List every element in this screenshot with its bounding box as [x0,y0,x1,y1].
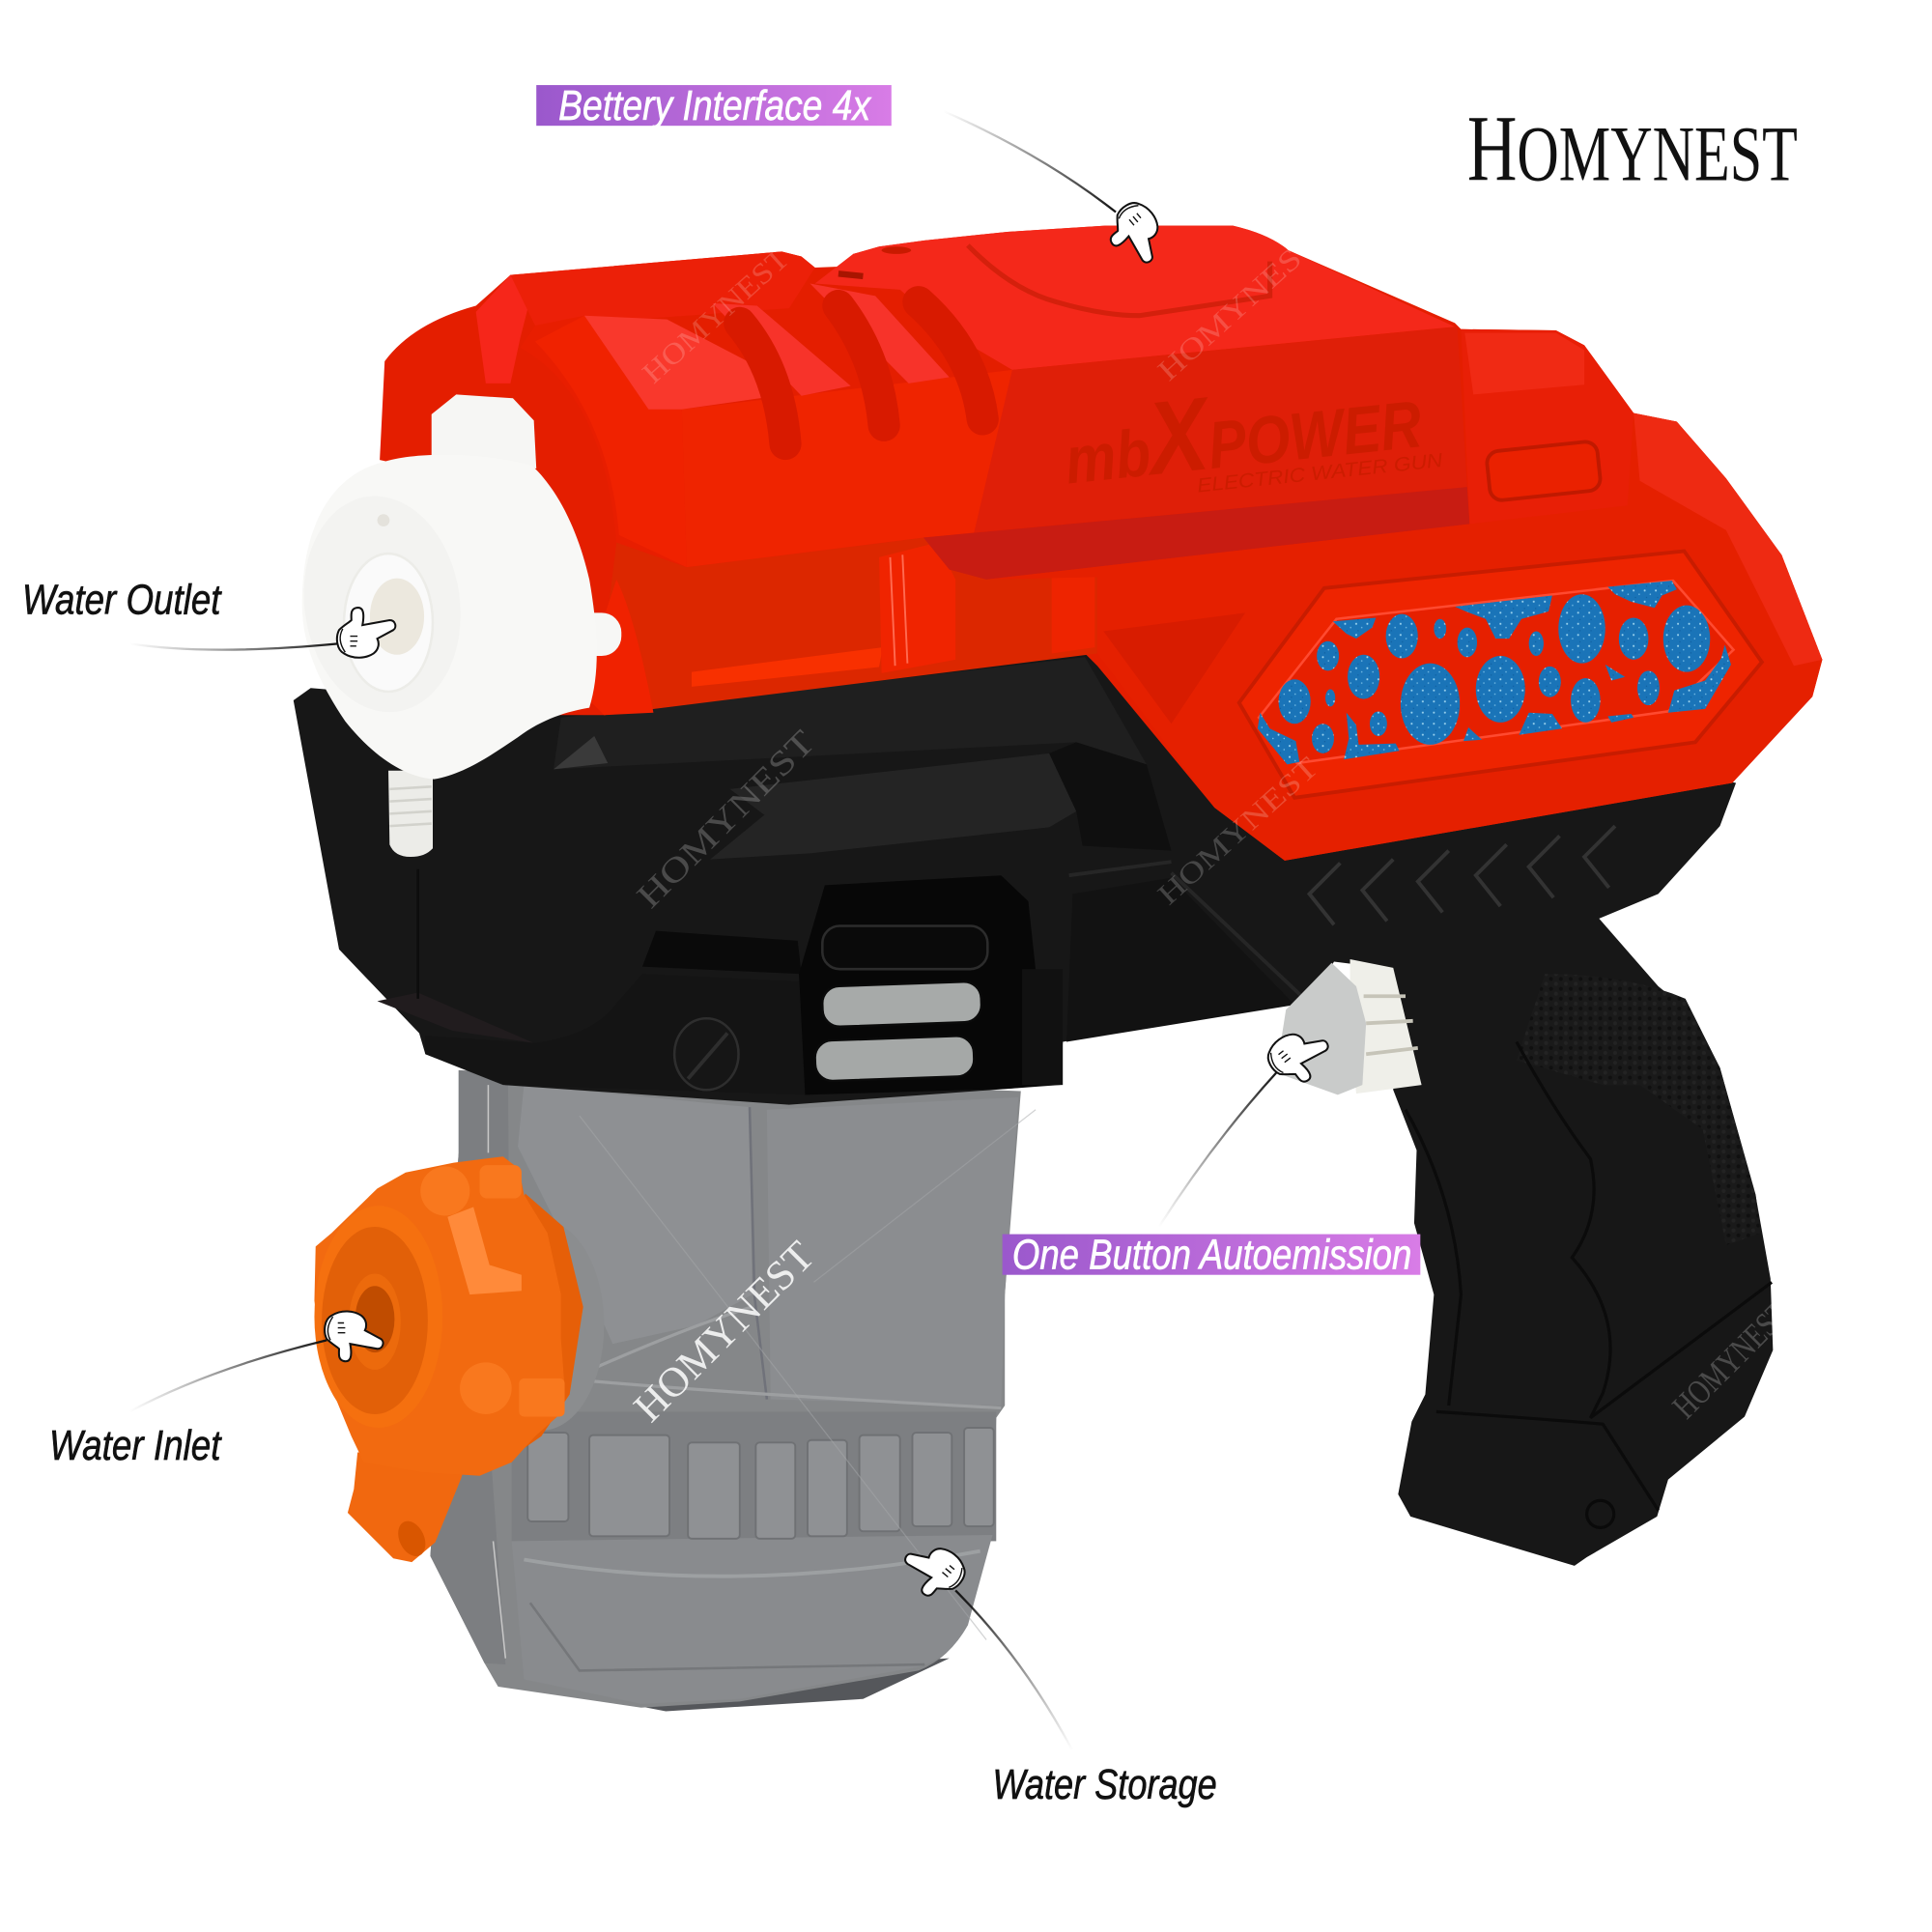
white water outlet cap [290,394,621,857]
oval grooves [740,302,982,443]
blue glitter bubbles [1279,594,1710,753]
black body and grip [294,653,1773,1566]
brand logo: Homynest: HOMYNEST [1467,97,1798,200]
rear ring [476,275,535,384]
callout: Water Inlet [49,1312,384,1469]
top plateau [815,226,1455,370]
chevrons [1309,826,1615,924]
icon: pointing hand, battery [1099,196,1175,272]
barrel [580,537,1097,715]
latch plate [799,875,1048,1094]
watermarks: HOMYNEST [1151,226,1324,387]
watermarks: HOMYNEST [1664,1293,1797,1426]
right front face [955,327,1467,532]
callout: Water Inlet: Water Inlet [49,1423,222,1469]
embossed brand logo: mbXPOWER [1058,353,1426,506]
icon: pointing hand, inlet [325,1312,384,1361]
callout: One Button Autoemission [1003,1017,1420,1278]
watermarks: HOMYNEST [1151,751,1324,911]
latch slots [814,926,987,1082]
embossed brand logo: ELECTRIC WATER GUN [1196,450,1444,497]
red upper housing [380,226,1822,861]
side switch pill [1486,440,1602,501]
front nose face [682,370,1012,567]
watermarks [625,226,1797,1431]
top ribs [584,284,950,410]
icon: pointing hand, storage [895,1531,972,1607]
icon: pointing hand, outlet [337,608,395,658]
callout: Bettery Interface [536,83,1175,272]
callout: Water Outlet [22,578,395,658]
callout: Water Storage: Water Storage [992,1762,1217,1808]
water gun product [290,226,1822,1712]
watermarks: HOMYNEST [625,1233,823,1431]
blue glitter background gaps [1258,581,1731,764]
trigger [1276,959,1422,1094]
water storage tank [430,1070,1036,1712]
callout: One Button Autoemission: One Button Autoemission [1012,1232,1411,1278]
screw [674,1018,739,1090]
watermarks: HOMYNEST [636,242,796,389]
callout: Water Outlet: Water Outlet [22,578,222,624]
orange water inlet cap [314,1156,604,1562]
glitter side panel [1239,552,1762,798]
icon: pointing hand, trigger [1261,1017,1338,1093]
grip texture [1517,974,1761,1245]
watermarks: HOMYNEST [629,723,822,916]
callout: Water Storage [895,1531,1217,1808]
callout: Bettery Interface: Bettery Interface 4x [558,83,871,129]
